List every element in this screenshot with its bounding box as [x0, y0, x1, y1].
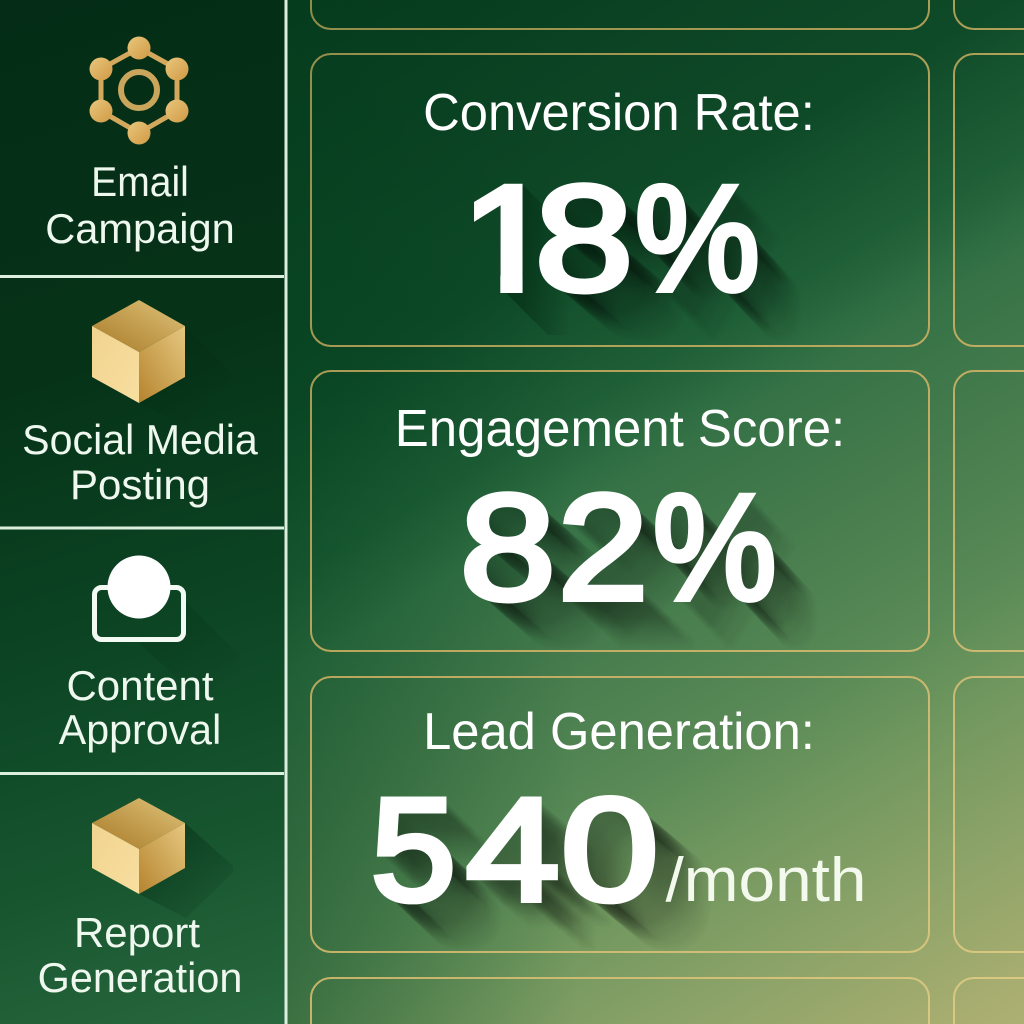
metric value: 82%: 8	[460, 463, 556, 631]
metric value: 18%: 1	[461, 154, 556, 322]
label: Campaign: Campaign	[45, 205, 235, 252]
icon: white approval stamp	[94, 556, 240, 690]
label: Social Media: Social Media	[22, 416, 258, 463]
sidebar dividers	[0, 0, 286, 1024]
label: Email: Email	[91, 158, 189, 205]
icon: gold network hexagon	[90, 36, 188, 144]
metric value: 540: 4	[466, 768, 559, 931]
metric value: 18%	[474, 154, 793, 332]
metric value: 540	[371, 768, 704, 946]
metric label: Lead Generation: Lead Generation:	[423, 703, 815, 761]
label: Posting: Posting	[70, 461, 210, 508]
metric label: Engagement Score: Engagement Score:	[395, 400, 845, 458]
metric value: 540: 5	[371, 768, 456, 931]
metric value: 82%: %	[653, 463, 776, 631]
shading: main area left edge	[287, 0, 577, 1024]
label: Report: Report	[74, 909, 200, 956]
metric value: 82%: 2	[558, 463, 648, 631]
icon: gold cube report	[92, 798, 233, 918]
panel: left sidebar	[0, 0, 285, 1024]
shadow of the digit 1	[503, 186, 568, 335]
metric value: 82%	[460, 463, 811, 644]
label: Generation: Generation	[38, 954, 242, 1001]
label: Approval: Approval	[59, 706, 221, 753]
metric card frames	[311, 0, 1024, 1024]
metric unit: per month: /month	[666, 846, 866, 915]
metric value: 540: 0	[561, 768, 658, 931]
metric value: 18%: %	[635, 154, 760, 322]
icon: gold cube social	[92, 300, 232, 426]
label: Content: Content	[66, 662, 214, 709]
metric label: Conversion Rate: Conversion Rate:	[423, 84, 815, 142]
metric value: 18%: 8	[535, 154, 633, 322]
